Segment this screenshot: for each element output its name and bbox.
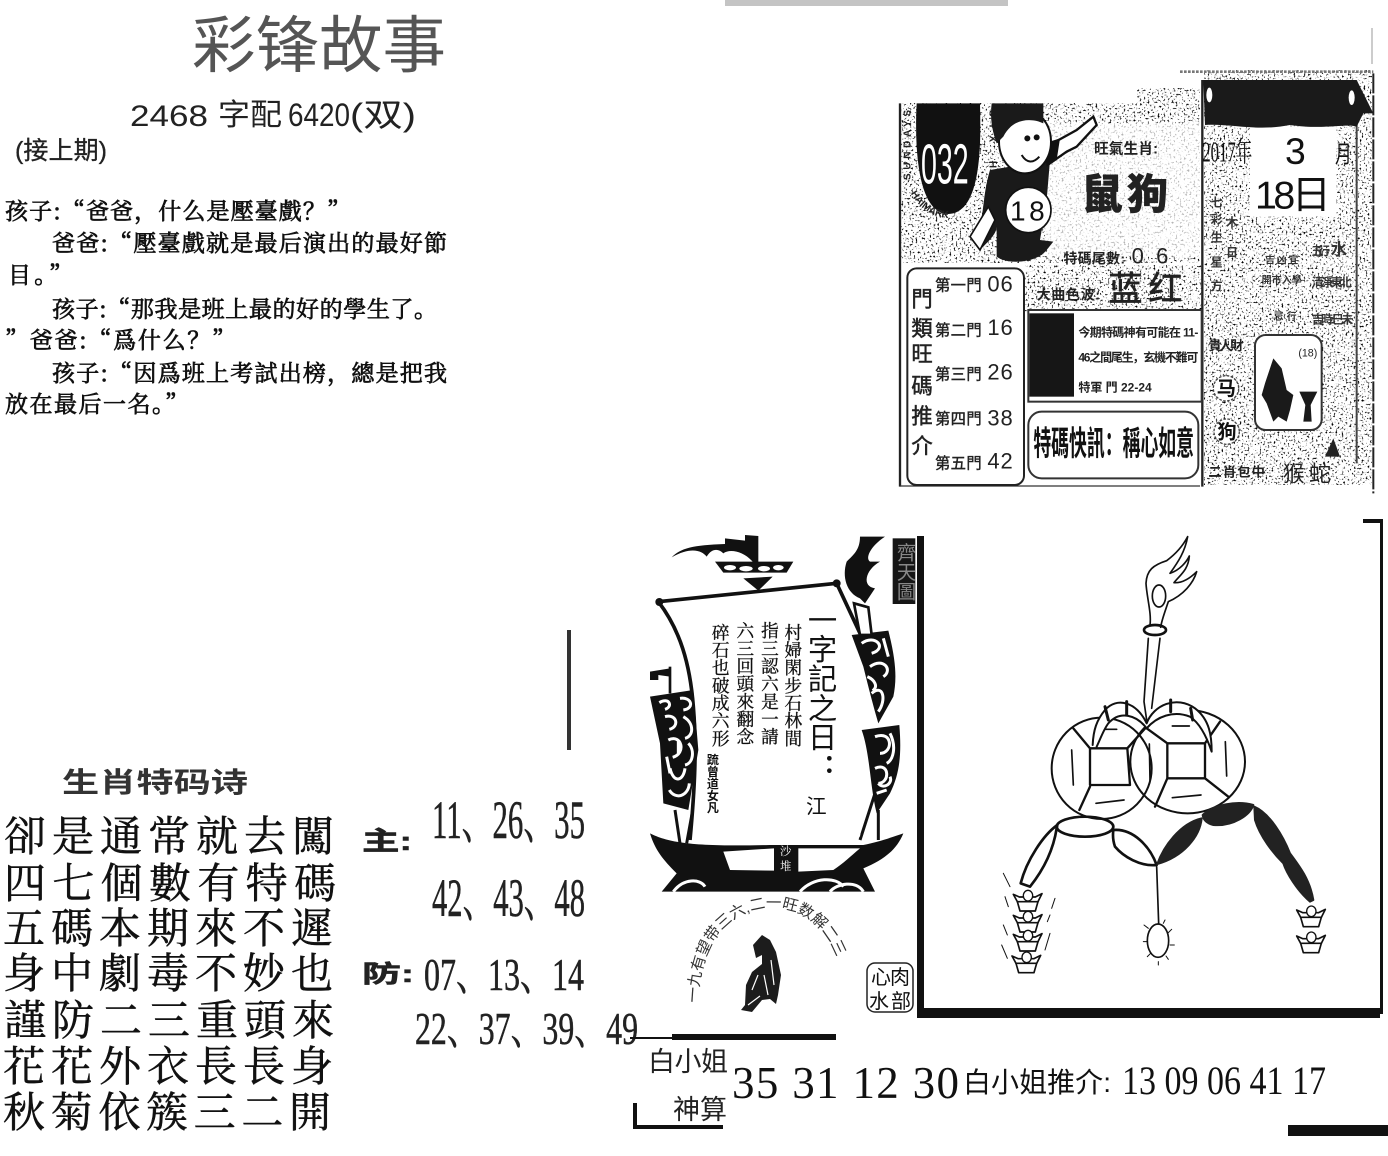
- panel: lottery newspaper calendar: [898, 70, 1374, 494]
- title: 彩锋故事: [192, 12, 446, 81]
- almanac notes: 吉凶宜: [1265, 253, 1298, 266]
- two zodiac pick: 二肖包中: [1208, 464, 1265, 480]
- almanac notes: 方: [1211, 278, 1223, 293]
- special tail digits: 0 6: [1132, 243, 1168, 268]
- two zodiac pick: 猴蛇: [1283, 462, 1331, 487]
- date block: 3: [1285, 130, 1306, 172]
- sail riddle title: [803, 605, 836, 818]
- poem heading: 生肖特码诗: [62, 767, 248, 798]
- hull: [650, 833, 903, 892]
- almanac notes: 七: [1211, 196, 1223, 210]
- defensive picks numbers: 07、13、14: [424, 949, 584, 1000]
- black notice box: [1028, 310, 1202, 402]
- colour wave: 蓝 红: [1108, 271, 1182, 309]
- black notice box: 特軍 門 22-24: [1078, 380, 1152, 395]
- almanac notes: 生: [1211, 230, 1223, 245]
- Miss Bai recommendation: [963, 1058, 1326, 1103]
- defensive picks numbers: 22、37、39、49: [415, 1003, 638, 1054]
- sail riddle verses: 六三回頭來翻念: [733, 621, 758, 745]
- joke dialogue text block: 孩子:“因爲班上考試出榜，總是把我: [52, 355, 447, 388]
- white content areas: [1047, 123, 1200, 257]
- zodiac emblem pair: [1082, 171, 1168, 217]
- panel: coin picture frame: [917, 519, 1383, 1018]
- rule and bracket for Miss Bai: [630, 1034, 836, 1129]
- main sail: [658, 583, 877, 840]
- stamp: inner pages: 肉: [890, 966, 910, 989]
- door numbers table: 第三門: [935, 365, 982, 383]
- colour wave: [1037, 271, 1182, 309]
- date block: 18日: [1255, 173, 1331, 217]
- hanging oval with rays: [1143, 867, 1174, 965]
- black notice box: 46之間尾生，玄機不難可: [1078, 350, 1198, 365]
- sail riddle title: 江: [806, 795, 827, 818]
- almanac notes: 彩: [1211, 212, 1223, 226]
- top right crescent pennant: [845, 537, 885, 603]
- continued from previous issue label: (接上期): [15, 137, 107, 165]
- zodiac emblem pair: 鼠: [1082, 171, 1122, 217]
- right patterned sails: [852, 631, 900, 813]
- almanac notes: 五行: [1312, 243, 1330, 258]
- Miss Bai heading: [648, 1047, 728, 1125]
- zodiac poem: 卻是通常就去闖: [4, 804, 334, 864]
- noble zodiac box: 马: [1217, 378, 1236, 400]
- left patterned sail: [650, 690, 698, 810]
- black notice box: 今期特碼神有可能在 11-: [1078, 325, 1198, 340]
- door numbers table: 推: [911, 404, 933, 428]
- badge ring text: SUNDAYS: [903, 110, 914, 180]
- zodiac poem: 四七個數有特碼: [4, 851, 336, 911]
- subtitle: number formula: 6420: [288, 97, 350, 133]
- cartoon boy mascot: [970, 103, 1097, 262]
- almanac notes: 星: [1211, 256, 1223, 270]
- door numbers table: 第五門: [935, 455, 982, 473]
- sail riddle title: 一字記之日: [803, 605, 836, 752]
- badge ring text: HAIMARK: [911, 190, 948, 218]
- top edge scan smear: [725, 0, 1008, 6]
- special code bulletin: 特碼快訊：稱心如意: [1033, 426, 1194, 463]
- corner stamp: 齊天圖: [893, 543, 916, 601]
- main picks numbers: 42、43、48: [432, 868, 585, 928]
- zodiac poem: 謹防二三重頭來: [4, 988, 334, 1048]
- left ingot stack: [1002, 873, 1055, 973]
- Miss Bai numbers: 35 31 12 30: [732, 1058, 959, 1108]
- rear masts: [675, 793, 878, 843]
- hull: 堆: [780, 858, 791, 874]
- door numbers table: 第二門: [935, 321, 982, 339]
- top right scan mark: [1371, 28, 1373, 64]
- stamp: inner pages: 心: [871, 967, 891, 989]
- stamp: inner pages: 水: [869, 990, 889, 1013]
- right ingot stack: [1297, 906, 1325, 953]
- issue number badge: [916, 103, 980, 214]
- picture: hand, coins and ingots: [1002, 537, 1325, 973]
- almanac notes: 水: [1331, 240, 1348, 259]
- Miss Bai recommendation: 13 09 06 41 17: [1122, 1058, 1326, 1103]
- joke dialogue text block: 放在最后一名。”: [5, 386, 188, 419]
- main picks numbers: 主:: [362, 826, 412, 856]
- almanac notes: 忌行: [1273, 310, 1297, 323]
- joke dialogue text block: 爸爸:“壓臺戲就是最后演出的最好節: [52, 225, 447, 258]
- ship flag and crow's nest: [672, 535, 793, 591]
- black banner: [1203, 80, 1373, 128]
- joke dialogue text block: [5, 193, 447, 419]
- door numbers table: 類: [911, 317, 933, 341]
- cartoon boy mascot: 18: [1010, 196, 1045, 227]
- defensive picks numbers: 防:: [362, 961, 414, 988]
- panel: ship riddle: [650, 535, 916, 892]
- paper speckle texture: [900, 70, 1372, 485]
- subtitle: number formula: (双): [350, 97, 416, 133]
- almanac notes: 清淨:東北: [1312, 275, 1352, 290]
- defensive picks numbers: [362, 949, 638, 1054]
- riddle author: 䟽曾道女凡: [705, 752, 719, 814]
- arc text with horse emblem: 一九有望带三六,二一旺数解二三: [687, 896, 846, 1002]
- noble zodiac box: [1208, 335, 1340, 457]
- almanac notes: 日: [1226, 246, 1238, 260]
- noble zodiac box: 狗: [1217, 421, 1237, 443]
- special tail digits: 特碼尾數:: [1063, 250, 1125, 266]
- main picks numbers: [362, 790, 585, 928]
- twin coins: [1052, 700, 1245, 819]
- sail riddle verses: 村婦閑步石林間: [781, 623, 806, 747]
- zodiac poem: 身中劇毒不妙也: [3, 941, 333, 1001]
- colour wave: 大曲色波:: [1037, 286, 1100, 302]
- hull: 沙: [780, 843, 792, 859]
- noble zodiac box: 貴人財: [1208, 338, 1243, 353]
- almanac notes: [1211, 196, 1353, 326]
- Miss Bai recommendation: 白小姐推介:: [963, 1067, 1111, 1098]
- badge ring text: [903, 110, 1038, 262]
- date block: 2017年: [1202, 137, 1252, 169]
- sail riddle verses: [708, 621, 806, 747]
- date block: 月: [1335, 142, 1352, 169]
- Miss Bai heading: 白小姐: [648, 1047, 728, 1077]
- door numbers table: 介: [911, 434, 933, 458]
- vertical rule: [567, 630, 571, 750]
- door numbers table: 門: [911, 288, 933, 312]
- sail riddle verses: 碎石也破成六形: [708, 623, 733, 747]
- door numbers table: 第一門: [935, 277, 982, 295]
- zodiac poem: 五碼本期來不遲: [3, 896, 333, 956]
- door numbers table: [907, 268, 1024, 485]
- joke dialogue text block: ”爸爸:“爲什么？”: [5, 322, 235, 355]
- stamp: inner pages: [867, 963, 913, 1013]
- joke dialogue text block: 孩子:“那我是班上最的好的學生了。: [52, 291, 437, 324]
- date block: [1202, 130, 1352, 217]
- door numbers table: 38: [987, 405, 1014, 430]
- zodiac poem: 花花外衣長長身: [3, 1034, 333, 1094]
- two zodiac pick: [1208, 462, 1331, 487]
- bottom right rule: [1288, 1125, 1388, 1136]
- door numbers table: 第四門: [935, 410, 982, 428]
- hand with ring: [1144, 537, 1197, 720]
- zodiac poem: [3, 804, 336, 1140]
- door numbers table: 16: [987, 315, 1014, 340]
- subtitle: number formula: 字配: [218, 99, 282, 132]
- almanac notes: 木: [1226, 215, 1238, 230]
- badge ring text: SIX HA: [986, 110, 997, 183]
- Miss Bai heading: 神算: [673, 1095, 727, 1125]
- special tail digits: [1063, 243, 1168, 268]
- door numbers table: 旺: [911, 343, 933, 367]
- panel borders: [896, 103, 903, 487]
- joke dialogue text block: 孩子:“爸爸，什么是壓臺戲？”: [5, 193, 350, 226]
- joke dialogue text block: 目。”: [8, 257, 72, 290]
- door numbers table: 碼: [911, 374, 933, 398]
- subtitle: number formula: [130, 97, 416, 133]
- zodiac emblem pair: 狗: [1127, 171, 1168, 217]
- lucky zodiac heading: 旺氣生肖:: [1094, 140, 1158, 157]
- noble zodiac box: (18): [1298, 348, 1317, 360]
- stamp: inner pages: 部: [891, 990, 911, 1013]
- white strap segments: [1021, 817, 1157, 887]
- special code bulletin: [1028, 412, 1198, 478]
- almanac notes: 吉時:巳未: [1312, 311, 1353, 326]
- main picks numbers: 11、26、35: [432, 790, 585, 850]
- issue number badge: 032: [921, 133, 969, 196]
- sail riddle verses: 指三認六是一請: [757, 621, 782, 745]
- door numbers table: 26: [987, 359, 1014, 384]
- icon: horse: [741, 935, 781, 1012]
- zodiac poem: 秋菊依簇三二開: [3, 1080, 331, 1140]
- subtitle: number formula: 2468: [130, 100, 208, 133]
- black strap segments: [1157, 803, 1313, 902]
- door numbers table: 06: [987, 271, 1014, 296]
- door numbers table: 42: [987, 449, 1014, 474]
- almanac notes: 開市入學: [1262, 273, 1302, 286]
